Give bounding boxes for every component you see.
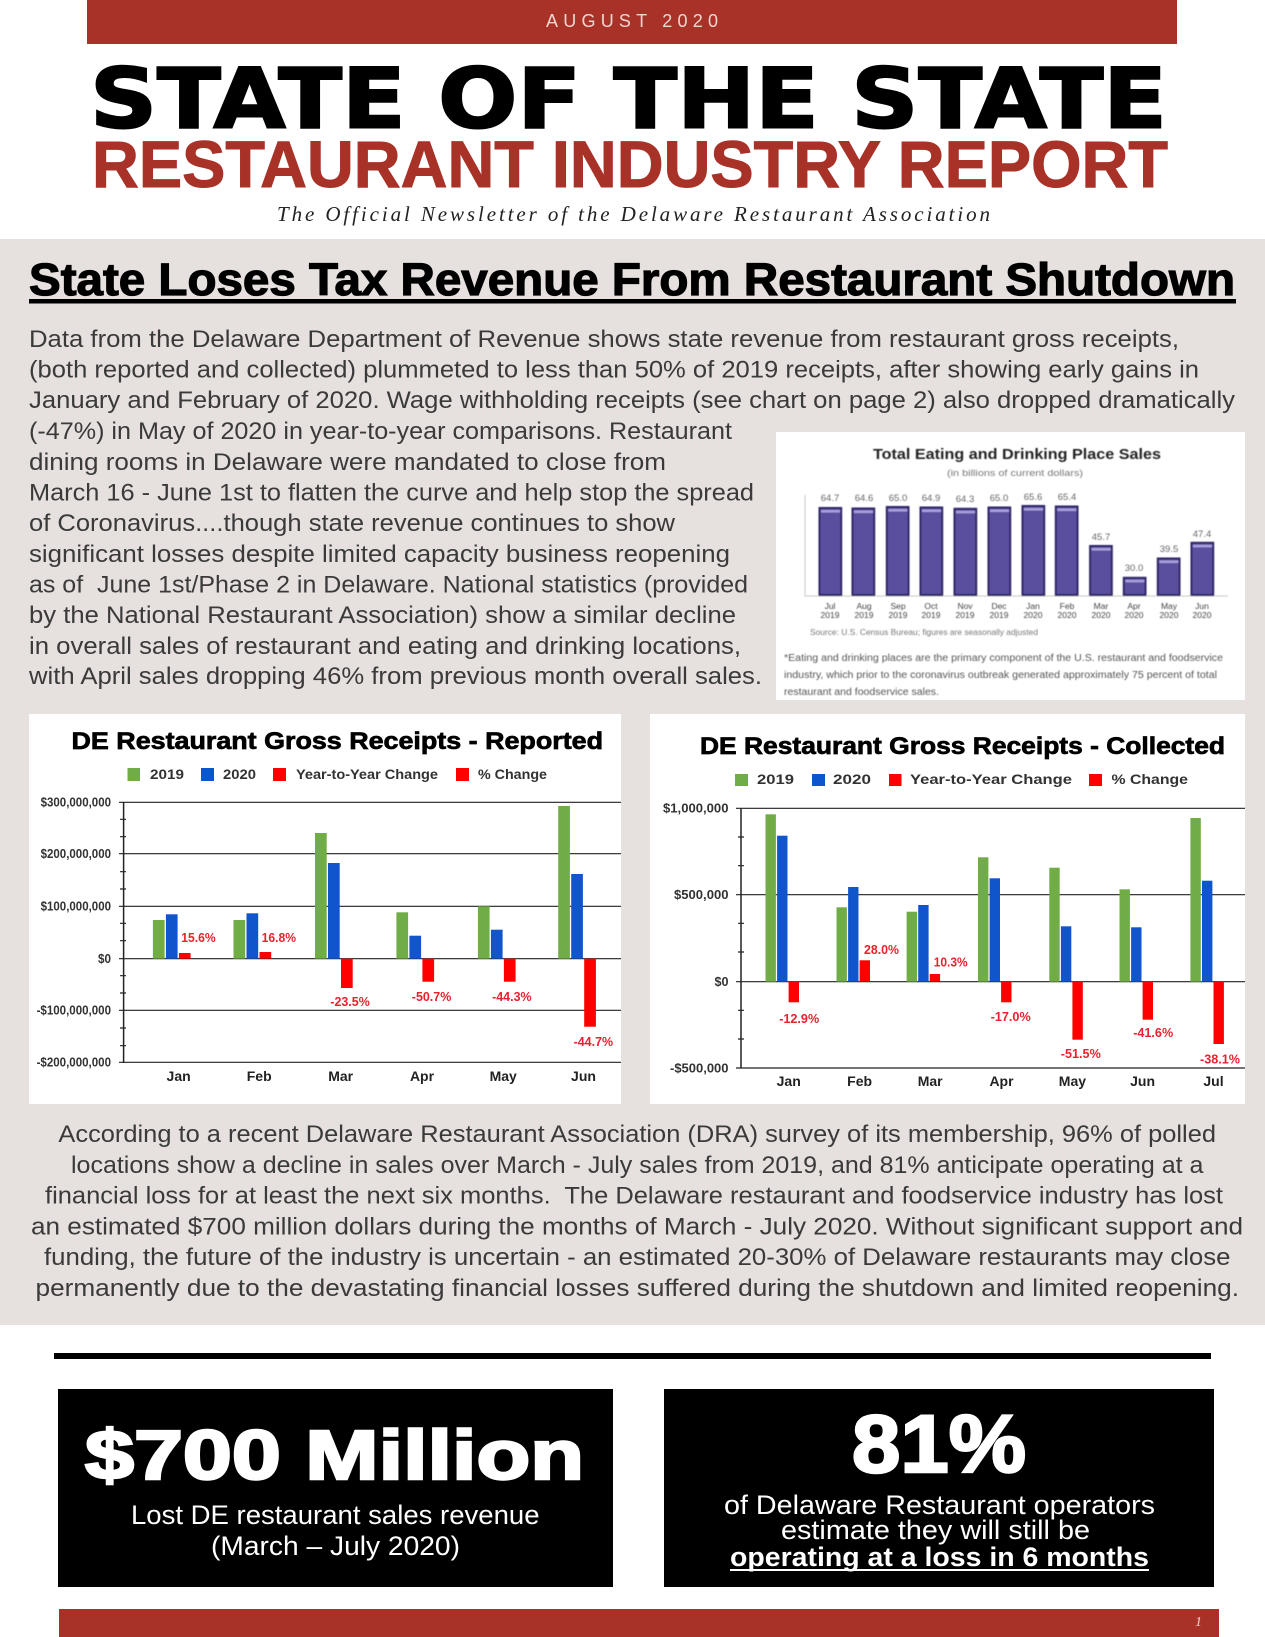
text block: survey paragraph: permanently due to the devastating financial losses suffered during the shutdown and limited reopening. [36,1275,1239,1302]
chart: total eating and drinking place sales [776,432,1245,700]
callout: $700 million: $700 Million [85,1416,584,1494]
percent labels: -41.6% [1133,1025,1174,1040]
text block: intro paragraph: Data from the Delaware Department of Revenue shows state revenue from restaurant gross receipts, [29,326,1179,353]
month labels: Apr [989,1073,1014,1089]
bars [766,814,1224,1044]
small chart contents: 2020 [1058,610,1077,620]
small chart contents: 30.0 [1125,563,1143,574]
percent labels: -44.7% [574,1034,614,1049]
percent labels: 16.8% [262,930,296,945]
small chart contents: Total Eating and Drinking Place Sales [873,446,1161,463]
legend: 2019 [150,766,184,782]
text block: intro paragraph: (-47%) in May of 2020 in year-to-year comparisons. Restaurant [29,418,732,445]
month labels: May [1059,1073,1086,1089]
percent labels: -17.0% [991,1009,1031,1024]
text block: intro paragraph: March 16 - June 1st to flatten the curve and help stop the spread [29,480,754,506]
text block: survey paragraph: financial loss for at least the next six months. The Delaware restaurant and foodservice industry has lost [45,1182,1223,1210]
small chart contents: Jan [1026,601,1040,611]
callout: $700 million: Lost DE restaurant sales revenue [131,1500,540,1530]
small chart contents [784,446,1228,698]
headline: State Loses Tax Revenue From Restaurant Shutdown [29,254,1235,305]
text block: survey paragraph: an estimated $700 million dollars during the months of March - July 2020. Without significant support and [31,1214,1243,1240]
y axis labels [37,794,111,1070]
text block: intro paragraph: with April sales dropping 46% from previous month overall sales. [28,663,762,690]
callout: 81%: of Delaware Restaurant operators [724,1490,1155,1520]
small chart contents: Apr [1127,601,1141,611]
small chart contents: May [1161,601,1178,611]
small chart contents: 2019 [821,610,840,620]
month labels: Apr [410,1068,435,1084]
month labels: May [490,1068,517,1084]
grid and axis [736,808,1245,1068]
month labels: Jun [1130,1073,1155,1089]
legend [735,771,1188,787]
legend: % Change [478,766,547,782]
y axis labels: -$200,000,000 [37,1054,111,1070]
y axis labels: $100,000,000 [41,898,111,914]
y axis labels: $0 [98,951,111,966]
small chart contents: 64.9 [922,493,940,504]
y axis labels: $300,000,000 [41,794,111,810]
grid and axis [119,802,621,1063]
callout: $700 million [58,1389,613,1587]
month labels: Feb [847,1073,872,1089]
legend: % Change [1112,771,1188,787]
y axis labels: $200,000,000 [41,846,111,861]
y axis labels: -$500,000 [670,1060,728,1076]
callout: $700 million: (March – July 2020) [211,1531,460,1561]
small chart contents: Jun [1195,601,1209,611]
small chart contents: Aug [856,601,872,611]
legend: 2020 [833,771,871,787]
percent labels: -44.3% [492,989,532,1004]
callout: 81%: estimate they will still be [781,1515,1090,1545]
month labels: Feb [247,1068,272,1084]
month labels [777,1073,1224,1089]
text block: survey paragraph: locations show a decline in sales over March - July sales from 2019, and 81% anticipate operating at a [71,1152,1204,1179]
month labels [167,1068,596,1084]
percent labels: -12.9% [779,1011,820,1026]
y axis labels: -$100,000,000 [37,1002,111,1018]
small chart contents: 65.6 [1024,492,1042,503]
small chart contents: 2020 [1193,610,1212,620]
small chart contents: 2019 [889,610,908,620]
chart: gross receipts collected [650,714,1245,1104]
legend [128,766,547,782]
small chart contents: Nov [957,601,973,611]
small chart contents: Feb [1060,601,1075,611]
chart title: DE Restaurant Gross Receipts - Collected [700,733,1225,760]
text block: intro paragraph: January and February of 2020. Wage withholding receipts (see chart on page 2) also dropped dramatically [29,387,1235,414]
legend: 2020 [223,766,256,782]
small chart contents: 2019 [990,610,1009,620]
small chart contents: 2019 [956,610,975,620]
small chart contents: Oct [924,601,938,611]
percent labels: -50.7% [412,989,452,1004]
month labels: Jan [777,1073,801,1089]
subtitle: RESTAURANT INDUSTRY REPORT [92,127,1168,201]
footer bar with page number: 1 [1195,1615,1202,1630]
text block: intro paragraph: of Coronavirus....though state revenue continues to show [29,510,676,537]
y axis labels: $1,000,000 [663,800,728,816]
small chart contents: 2020 [1125,610,1144,620]
text block: intro paragraph: (both reported and collected) plummeted to less than 50% of 2019 receipts, after showing early gains in [29,356,1199,384]
y axis labels: $0 [714,974,728,989]
small chart contents: 65.0 [990,493,1008,504]
small chart contents: *Eating and drinking places are the primary component of the U.S. restaurant and foodservice [784,653,1223,664]
small chart contents: 2019 [922,610,941,620]
text block: intro paragraph: as of June 1st/Phase 2 in Delaware. National statistics (provided [29,572,748,598]
small chart contents: 2020 [1024,610,1043,620]
percent labels: 10.3% [934,954,968,970]
legend: Year-to-Year Change [910,771,1072,787]
percent labels: -38.1% [1200,1052,1240,1066]
bars [153,806,596,1027]
text block: intro paragraph: in overall sales of restaurant and eating and drinking locations, [29,633,741,660]
footer bar with page number [59,1609,1219,1637]
legend: 2019 [757,771,794,787]
month labels: Jul [1203,1073,1224,1089]
month labels: Mar [918,1073,943,1089]
small chart contents: Mar [1094,601,1108,611]
chart title: DE Restaurant Gross Receipts - Reported [72,728,603,755]
top banner: date [87,0,1177,44]
small chart contents: 65.4 [1058,492,1076,503]
y axis labels: $500,000 [674,887,728,902]
text block: intro paragraph: dining rooms in Delaware were mandated to close from [29,449,666,476]
small chart contents: 2020 [1092,610,1111,620]
text block: survey paragraph: funding, the future of the industry is uncertain - an estimated 20-30% of Delaware restaurants may close [44,1244,1230,1271]
small chart contents: Jul [825,601,836,611]
text block: intro paragraph: significant losses despite limited capacity business reopening [29,541,730,568]
small chart contents: 64.7 [821,493,839,504]
percent labels [779,942,1240,1066]
text block: intro paragraph: by the National Restaurant Association) show a similar decline [29,602,736,629]
small chart contents: 2019 [855,610,874,620]
small chart contents: Source: U.S. Census Bureau; figures are seasonally adjusted [810,627,1038,637]
text block: survey paragraph [31,1121,1243,1302]
tagline: The Official Newsletter of the Delaware Restaurant Association [277,202,990,226]
small chart contents: 47.4 [1193,529,1211,540]
callout: 81%: 81% [852,1399,1026,1490]
small chart contents: 64.3 [956,494,974,505]
chart: gross receipts reported [29,714,621,1104]
y axis labels [663,800,728,1076]
small chart contents: 2020 [1160,610,1179,620]
percent labels: 15.6% [181,930,216,945]
month labels: Mar [328,1068,354,1084]
small chart contents: restaurant and foodservice sales. [784,687,939,698]
small chart contents: 39.5 [1160,544,1178,555]
callout: 81% [664,1389,1214,1587]
percent labels: 28.0% [864,942,899,957]
text block: intro paragraph [28,326,1235,690]
percent labels: -23.5% [330,994,370,1009]
percent labels [181,930,614,1049]
callout: 81%: operating at a loss in 6 months [730,1542,1149,1572]
small chart contents: 45.7 [1092,532,1110,543]
small chart contents: 64.6 [855,493,873,504]
text block: survey paragraph: According to a recent Delaware Restaurant Association (DRA) survey of its membership, 96% of polled [58,1121,1216,1148]
month labels: Jan [167,1068,191,1084]
small chart contents: (in billions of current dollars) [947,468,1083,479]
title: STATE OF THE STATE [90,50,1167,148]
small chart contents: industry, which prior to the coronavirus outbreak generated approximately 75 percent of total [784,670,1217,681]
panel: main article [0,239,1265,1325]
month labels: Jun [571,1068,596,1084]
percent labels: -51.5% [1061,1046,1101,1061]
legend: Year-to-Year Change [296,766,438,782]
small chart contents: Dec [991,601,1007,611]
small chart contents: Sep [890,601,906,611]
top banner: date: AUGUST 2020 [546,11,718,31]
small chart contents: 65.0 [889,493,907,504]
